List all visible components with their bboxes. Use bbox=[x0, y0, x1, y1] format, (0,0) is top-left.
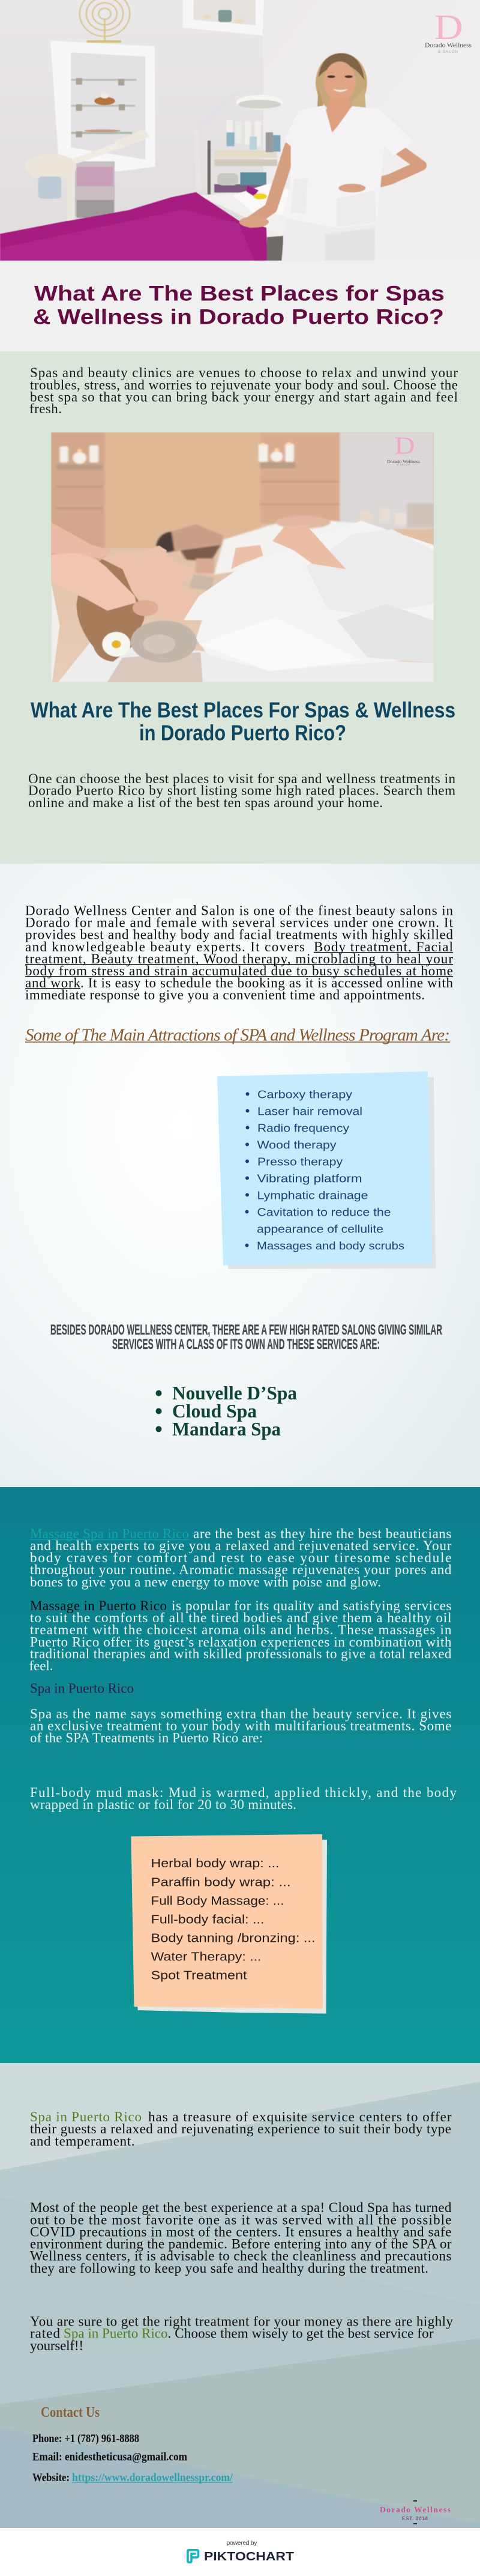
footer: powered by Piktochart: PIKTOCHART bbox=[204, 2550, 294, 2563]
intro paragraph: best spa so that you can bring back your energy and start again and feel bbox=[30, 390, 458, 405]
peach note: treatments list: Water Therapy: ... bbox=[151, 1951, 262, 1964]
peach note: treatments list: Full Body Massage: ... bbox=[151, 1894, 284, 1908]
peach note: treatments list: Full-body facial: ... bbox=[151, 1914, 264, 1927]
paragraph: Dorado Wellness Center: provides best and healthy body and facial treatments with highly skilled bbox=[25, 927, 454, 942]
paragraph: massage in Puerto Rico: to suit the comforts of all the tired bodies and give them a healthy oil bbox=[30, 1610, 451, 1625]
paragraph: massage spa: and health experts to give you a relaxed and rejuvenated service. Your bbox=[30, 1538, 452, 1553]
main title bbox=[33, 282, 445, 329]
paragraph: Dorado Wellness Center bbox=[25, 903, 454, 1002]
peach note: treatments list: Paraffin body wrap: ... bbox=[151, 1876, 290, 1890]
paragraph: massage spa: throughout your routine. Aromatic massage rejuvenates your pores and bbox=[30, 1562, 452, 1577]
paragraph: Dorado Wellness Center: Body treatment, Facial bbox=[314, 939, 453, 954]
paragraph: COVID precautions: out to be the most favorite one as it was served with all the possible bbox=[30, 2212, 451, 2227]
blue note: attractions list: Radio frequency bbox=[257, 1122, 349, 1134]
paragraph: how to choose: online and make a list of the best ten spas around your home. bbox=[28, 795, 383, 810]
list: other spas: Mandara Spa bbox=[172, 1418, 281, 1440]
footer: powered by Piktochart bbox=[0, 2528, 480, 2576]
second heading bbox=[31, 698, 455, 745]
blue note: attractions list: Vibrating platform bbox=[257, 1172, 362, 1184]
paragraph: closing advice: yourself!! bbox=[30, 2338, 83, 2353]
title band bbox=[0, 261, 480, 351]
paragraph: COVID precautions: Wellness centers, it is advisable to check the cleanliness and precautions bbox=[30, 2249, 452, 2264]
peach note: treatments list bbox=[131, 1834, 327, 2014]
list: other spas bbox=[156, 1382, 297, 1440]
heading: besides Dorado Wellness bbox=[50, 1322, 442, 1353]
paragraph: massage spa: bones to give you a new energy to move with poise and glow. bbox=[30, 1574, 381, 1589]
hero logo wordmark bbox=[425, 42, 472, 54]
paragraph: spa treasure bbox=[30, 2109, 452, 2149]
hero logo wordmark: & SALON bbox=[438, 50, 458, 54]
main title: What Are The Best Places for Spas bbox=[34, 282, 445, 305]
spa massage photo bbox=[51, 432, 434, 682]
paragraph: massage spa: Massage Spa in Puerto Rico bbox=[30, 1526, 189, 1541]
Dorado Wellness logo stamp: EST. 2018 bbox=[402, 2516, 428, 2521]
panel: closing section and contact bbox=[0, 2063, 480, 2528]
paragraph: COVID precautions bbox=[30, 2200, 452, 2276]
contact details: Email: enidestheticusa@gmail.com bbox=[32, 2451, 187, 2464]
paragraph: spa treasure: Spa in Puerto Rico bbox=[30, 2109, 142, 2124]
spa photo logo wordmark: Dorado Wellness bbox=[387, 459, 420, 464]
contact details: https://www.doradowellnesspr.com/ bbox=[72, 2471, 233, 2484]
paragraph: Dorado Wellness Center: Dorado for male and female with several services under one crown. It bbox=[25, 915, 454, 930]
contact heading: Contact Us bbox=[41, 2405, 100, 2420]
list: other spas: Nouvelle D’Spa bbox=[172, 1382, 297, 1404]
paragraph: massage in Puerto Rico: feel. bbox=[29, 1658, 53, 1673]
panel: services section bbox=[0, 864, 480, 1487]
masseuse arms and hands bbox=[51, 523, 113, 559]
blue note: attractions list: Laser hair removal bbox=[257, 1106, 362, 1118]
spa massage photo: D bbox=[395, 432, 415, 459]
paragraph: massage in Puerto Rico: is popular for its quality and satisfying services bbox=[172, 1598, 452, 1613]
paragraph: massage in Puerto Rico: treatment with the choicest aroma oils and herbs. These massages in bbox=[30, 1622, 452, 1637]
woman's face and neck bbox=[101, 545, 194, 602]
peach note: treatments list: Body tanning /bronzing: ... bbox=[151, 1932, 316, 1945]
paragraph: closing advice bbox=[30, 2314, 454, 2353]
paragraph: how to choose: One can choose the best places to visit for spa and wellness treatments in bbox=[28, 771, 456, 786]
paragraph: COVID precautions: environment during the pandemic. Before entering into any of the SPA or bbox=[30, 2237, 452, 2252]
peach note: treatments list: Herbal body wrap: ... bbox=[151, 1857, 280, 1870]
blue note: attractions list bbox=[217, 1071, 436, 1269]
paragraph: massage in Puerto Rico bbox=[29, 1598, 452, 1673]
paragraph: Dorado Wellness Center: body from stress and strain accumulated due to busy schedules at home bbox=[25, 963, 453, 978]
paragraph: mud mask: Full-body mud mask: Mud is warmed, applied thickly, and the body bbox=[30, 1785, 457, 1800]
paragraph: closing advice: rated bbox=[30, 2326, 60, 2341]
blue note: attractions list: Wood therapy bbox=[257, 1139, 336, 1151]
paragraph: spa treasure: and temperament. bbox=[30, 2133, 134, 2149]
paragraph: closing advice: . Choose them wisely to get the best service for bbox=[168, 2326, 434, 2341]
blue note: attractions list: Presso therapy bbox=[257, 1156, 343, 1168]
paragraph: massage spa: body craves for comfort and rest to ease your tiresome schedule bbox=[30, 1550, 451, 1565]
subheading: spa in Puerto Rico: Spa in Puerto Rico bbox=[30, 1681, 134, 1696]
panel: teal massage and spa section bbox=[0, 1487, 480, 2063]
paragraph: massage in Puerto Rico: Massage in Puerto Rico bbox=[30, 1598, 167, 1613]
second heading: in Dorado Puerto Rico? bbox=[139, 721, 346, 745]
peach note: treatments list: Spot Treatment bbox=[151, 1969, 247, 1982]
hero logo wordmark: Dorado Wellness bbox=[425, 42, 472, 49]
paragraph: spa treasure: has a treasure of exquisite service centers to offer bbox=[148, 2109, 452, 2124]
intro paragraph: Spas and beauty clinics are venues to choose to relax and unwind your bbox=[30, 365, 458, 380]
paragraph: spa treatments: of the SPA Treatments in Puerto Rico are: bbox=[30, 1730, 263, 1745]
paragraph: massage spa: are the best as they hire the best beauticians bbox=[193, 1526, 452, 1541]
blue note: attractions list: Massages and body scrubs bbox=[257, 1240, 404, 1252]
paragraph: Dorado Wellness Center: Dorado Wellness Center and Salon is one of the finest beauty salons in bbox=[25, 903, 454, 918]
paragraph: COVID precautions: COVID precautions in most of the centers. It ensures a healthy and safe bbox=[30, 2225, 451, 2239]
paragraph: Dorado Wellness Center: and knowledgeable beauty experts. It covers bbox=[25, 939, 305, 954]
paragraph: spa treatments: an exclusive treatment to your body with multifarious treatments. Some bbox=[30, 1718, 451, 1733]
paragraph: mud mask: wrapped in plastic or foil for 20 to 30 minutes. bbox=[30, 1797, 296, 1812]
intro paragraph: troubles, stress, and worries to rejuvenate your body and soul. Choose the bbox=[30, 377, 458, 392]
heading: main attractions: Some of The Main Attractions of SPA and Wellness Program Are: bbox=[25, 1026, 450, 1045]
paragraph: spa treatments bbox=[30, 1706, 452, 1745]
Dorado Wellness logo stamp: Dorado Wellness bbox=[380, 2505, 451, 2514]
paragraph: Dorado Wellness Center: treatment, Beauty treatment, Wood therapy, microblading to heal your bbox=[25, 951, 453, 966]
contact details bbox=[32, 2432, 233, 2484]
paragraph: COVID precautions: they are following to keep you safe and healthy during the treatment. bbox=[30, 2261, 428, 2276]
intro paragraph: fresh. bbox=[29, 401, 62, 416]
footer: powered by Piktochart: powered by bbox=[227, 2539, 257, 2547]
white robe bbox=[184, 521, 434, 671]
paragraph: mud mask bbox=[30, 1785, 457, 1812]
paragraph: how to choose bbox=[28, 771, 456, 810]
blue note: attractions list: appearance of cellulite bbox=[257, 1223, 383, 1235]
icon: Piktochart logo bbox=[188, 2550, 198, 2562]
hero photo: esthetician in treatment room bbox=[0, 0, 480, 261]
paragraph: Dorado Wellness Center: and work bbox=[25, 975, 80, 990]
paragraph: closing advice: You are sure to get the right treatment for your money as there are highly bbox=[30, 2314, 454, 2329]
woman's hair bbox=[77, 559, 147, 662]
blue note: attractions list: Carboxy therapy bbox=[257, 1088, 352, 1100]
contact details: Phone: +1 (787) 961-8888 bbox=[32, 2432, 139, 2445]
contact details: Website: bbox=[32, 2471, 70, 2484]
paragraph: Dorado Wellness Center: . It is easy to schedule the booking as it is accessed online with bbox=[80, 975, 454, 990]
paragraph: massage in Puerto Rico: Puerto Rico offer its guest’s relaxation experiences in combination with bbox=[30, 1634, 452, 1649]
paragraph: spa treatments: Spa as the name says something extra than the beauty service. It gives bbox=[30, 1706, 452, 1721]
paragraph: COVID precautions: Most of the people get the best experience at a spa! Cloud Spa has turned bbox=[30, 2200, 452, 2215]
Dorado Wellness logo stamp bbox=[380, 2500, 451, 2524]
panel: green intro section bbox=[0, 351, 480, 864]
man behind bbox=[155, 515, 354, 590]
blue note: attractions list: Lymphatic drainage bbox=[257, 1189, 368, 1201]
spa photo logo wordmark bbox=[387, 459, 420, 466]
hero photo: esthetician in treatment room: D bbox=[434, 7, 463, 47]
paragraph: massage spa bbox=[30, 1526, 452, 1589]
paragraph: how to choose: Dorado Puerto Rico by short listing some high rated places. Search them bbox=[28, 783, 455, 798]
paragraph: Dorado Wellness Center: immediate response to give you a convenient time and appointments. bbox=[25, 987, 425, 1002]
paragraph: spa treasure: their guests a relaxed and rejuvenating experience to suit their body type bbox=[30, 2121, 451, 2136]
paragraph: closing advice: Spa in Puerto Rico bbox=[64, 2326, 168, 2341]
list: other spas: Cloud Spa bbox=[172, 1400, 257, 1422]
blue note: attractions list: Cavitation to reduce the bbox=[257, 1206, 391, 1218]
paragraph: massage in Puerto Rico: traditional therapies and with skilled professionals to give a total relaxed bbox=[30, 1646, 452, 1661]
intro paragraph bbox=[29, 365, 458, 416]
spa photo logo wordmark: & SALON bbox=[397, 463, 410, 466]
main title: & Wellness in Dorado Puerto Rico? bbox=[33, 305, 444, 329]
